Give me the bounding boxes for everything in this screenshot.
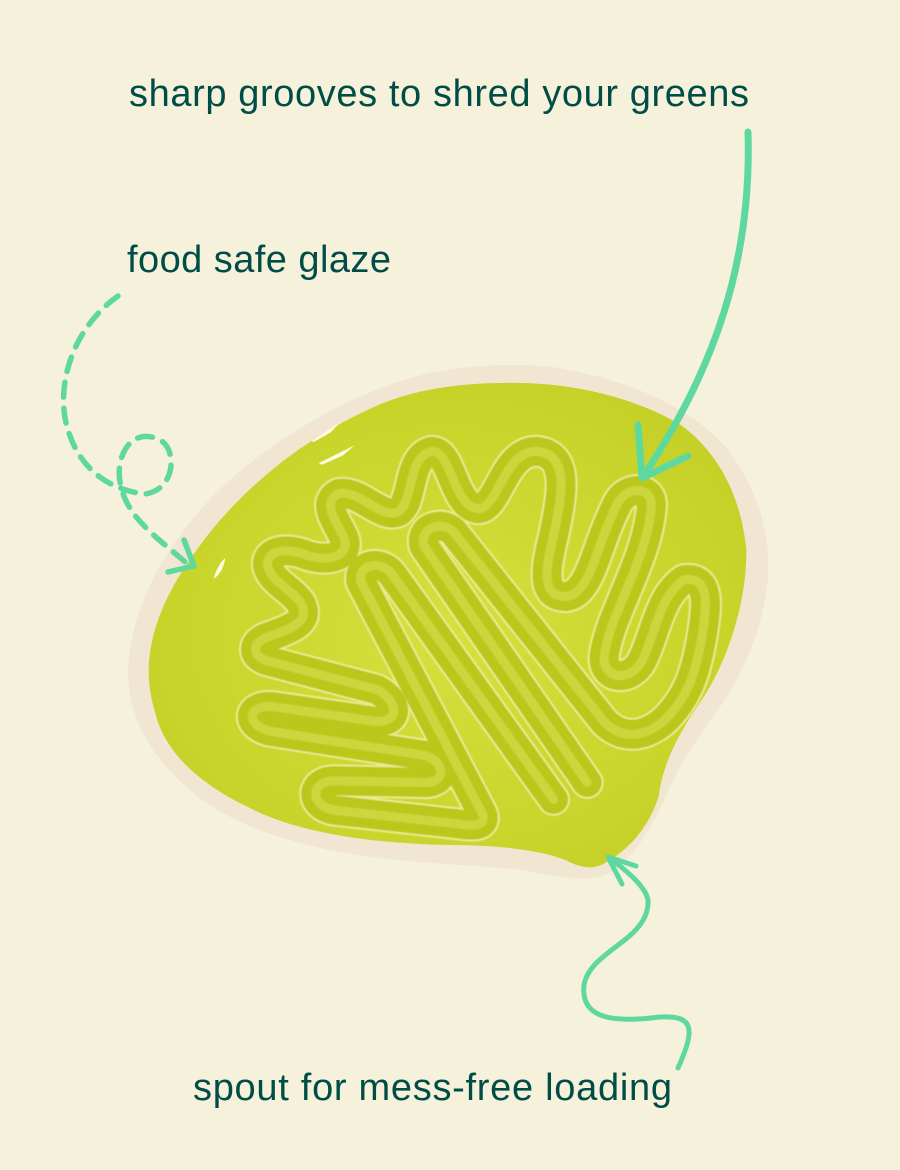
grooves: highlight bbox=[252, 451, 706, 825]
arrow: to spout bbox=[584, 857, 689, 1068]
grooves: serpentine ridge bbox=[252, 451, 706, 825]
grooves: channel bbox=[252, 451, 706, 825]
heading: sharp grooves label: sharp grooves to shred your greens bbox=[129, 73, 749, 115]
plate glaze bbox=[149, 383, 746, 867]
plate rim bbox=[128, 365, 768, 878]
arrow: to sharp grooves bbox=[638, 132, 748, 478]
arrow: dashed to glaze bbox=[64, 296, 194, 572]
glaze highlights bbox=[213, 422, 355, 579]
heading: spout label: spout for mess-free loading bbox=[193, 1067, 672, 1109]
heading: food safe glaze label: food safe glaze bbox=[127, 239, 391, 281]
illustration: green ceramic grater plate bbox=[128, 365, 768, 878]
